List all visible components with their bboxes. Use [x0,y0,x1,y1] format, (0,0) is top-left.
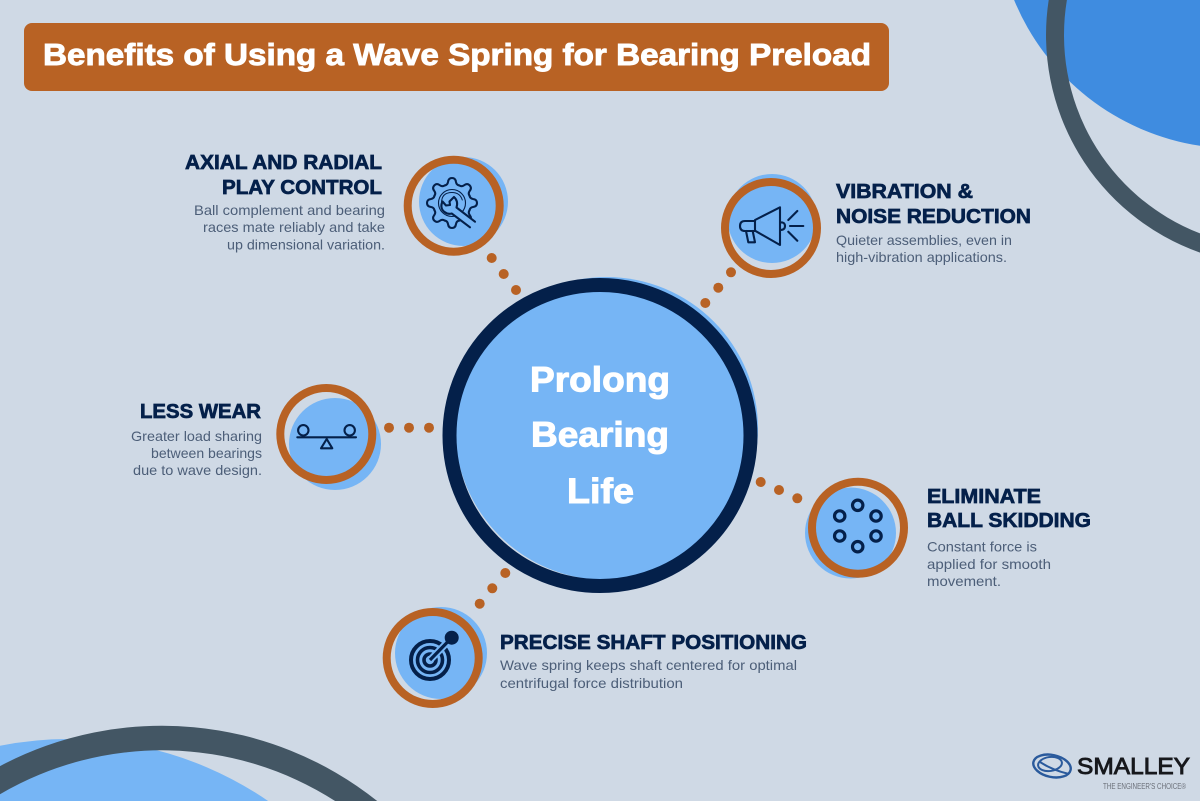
heading and text: axial and radial play control: Ball complement and bearing [194,203,385,218]
icon: megaphone in ring [725,174,817,274]
heading and text: precise shaft positioning [500,631,807,691]
central circle: Prolong Bearing Life: Bearing [531,416,669,454]
logo: Smalley: SMALLEY [1077,753,1190,779]
heading and text: eliminate ball skidding: movement. [927,574,1001,589]
title banner [24,23,889,91]
heading and text: less wear [131,400,262,478]
heading and text: precise shaft positioning: centrifugal force distribution [500,676,683,691]
heading and text: less wear: between bearings [151,446,262,461]
heading and text: axial and radial play control: up dimensional variation. [227,238,385,252]
heading and text: eliminate ball skidding: ELIMINATE [927,485,1041,508]
heading and text: vibration and noise reduction [836,180,1031,265]
heading and text: eliminate ball skidding: BALL SKIDDING [927,509,1091,532]
heading and text: precise shaft positioning: PRECISE SHAFT POSITIONING [500,631,807,654]
decoration: bottom-left blue circle and ring [0,726,377,801]
connector dots: eliminate ball skidding [756,477,802,503]
connector dots: vibration and noise reduction [700,267,736,308]
icon: target with dart in ring [387,607,487,704]
heading and text: precise shaft positioning: Wave spring keeps shaft centered for optimal [500,658,797,673]
connector dots: less wear [384,423,434,433]
icon: gear and wrench in ring [408,157,508,252]
heading and text: eliminate ball skidding: applied for smooth [927,557,1051,572]
central circle: Prolong Bearing Life: Life [567,472,634,511]
connector dots: axial and radial play control [487,253,521,295]
connector dots: precise shaft positioning [475,568,510,609]
heading and text: vibration and noise reduction: Quieter assemblies, even in [836,233,1012,248]
heading and text: less wear: due to wave design. [133,463,262,478]
heading and text: axial and radial play control: races mate reliably and take [203,220,385,235]
heading and text: eliminate ball skidding [927,485,1091,589]
central circle: Prolong Bearing Life: Prolong [530,360,670,400]
title banner: Benefits of Using a Wave Spring for Bearing Preload [43,37,871,72]
decoration: top-right blue circle and ring [1014,0,1200,253]
central circle: Prolong Bearing Life [450,277,758,586]
logo: Smalley [1031,751,1190,791]
heading and text: vibration and noise reduction: VIBRATION & [836,180,973,203]
icon: ball bearing circles in ring [805,482,904,578]
heading and text: axial and radial play control: AXIAL AND RADIAL [185,151,382,174]
heading and text: axial and radial play control [185,151,385,252]
heading and text: vibration and noise reduction: high-vibration applications. [836,250,1007,265]
icon: seesaw balance in ring [280,388,381,490]
heading and text: less wear: LESS WEAR [140,400,261,423]
heading and text: less wear: Greater load sharing [131,429,262,444]
heading and text: eliminate ball skidding: Constant force is [927,540,1037,554]
heading and text: vibration and noise reduction: NOISE REDUCTION [836,205,1031,228]
heading and text: axial and radial play control: PLAY CONTROL [222,176,382,199]
